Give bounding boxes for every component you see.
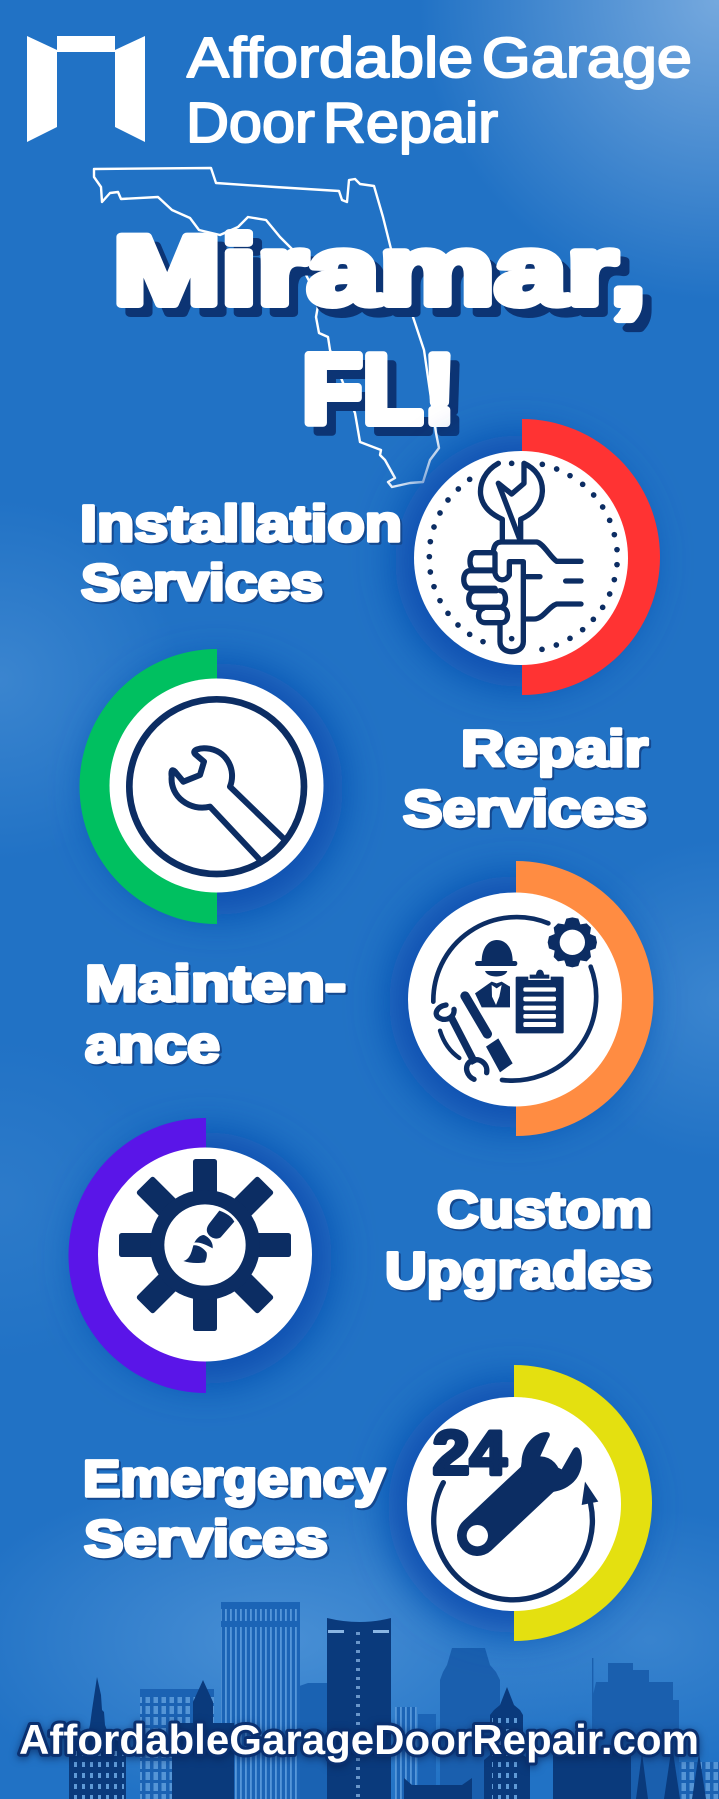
website url: AffordableGarageDoorRepair.com [19,1716,699,1763]
heading: custom upgrades: Custom [437,1181,652,1238]
heading: repair services: Repair [461,720,648,777]
heading: installation services: Installation [80,495,402,552]
heading: maintenance: ance [85,1016,220,1073]
brand name [186,26,692,155]
icon: wrench in circle [129,699,304,874]
heading: installation services: Services [81,554,323,611]
logo mark [27,36,145,142]
heading: emergency services [83,1450,386,1567]
title [113,215,646,444]
panel: repair services [80,649,343,924]
brand name: Door Repair [186,91,498,155]
title: Miramar, [113,215,646,325]
icon: technician, clipboard and tools [433,917,597,1081]
heading: custom upgrades [385,1181,652,1299]
icon: 24 hour wrench [433,1419,598,1600]
panel: installation services [395,419,660,695]
heading: maintenance: Mainten- [85,955,346,1012]
brand name: Affordable Garage [187,26,692,90]
icon: hand holding wrench [426,460,620,652]
heading: custom upgrades: Upgrades [385,1242,652,1299]
heading: repair services: Services [403,780,647,837]
heading: emergency services: Services [84,1510,328,1567]
heading: maintenance [85,955,346,1073]
heading: repair services [403,720,648,837]
heading: installation services [80,495,402,611]
panel: custom upgrades [68,1118,332,1393]
icon: gear with paint brush [119,1159,291,1331]
heading: emergency services: Emergency [83,1450,386,1507]
skyline [69,1602,719,1799]
florida outline map [94,168,439,487]
icon: 24 hour wrench: 24 [433,1419,507,1488]
panel: emergency services [388,1365,652,1641]
title: FL! [302,334,456,444]
panel: maintenance [389,861,653,1136]
